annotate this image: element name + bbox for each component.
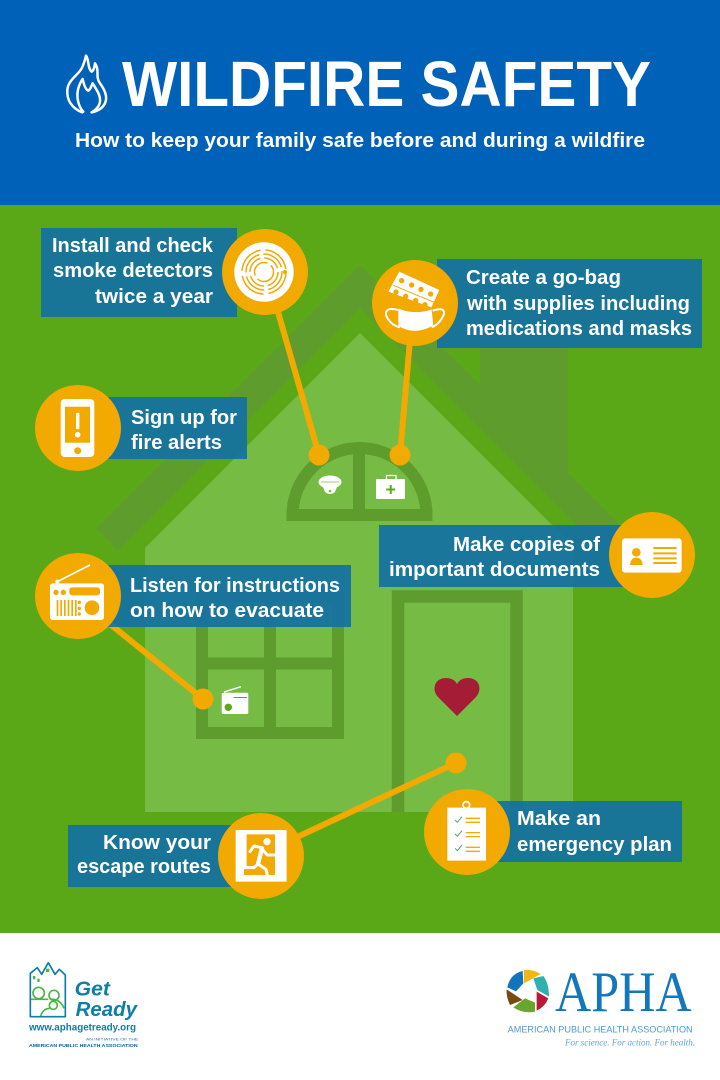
icon: small first aid bag xyxy=(376,476,405,499)
icon: radio xyxy=(50,565,104,620)
callout: fire alerts xyxy=(35,385,247,471)
logo: Get Ready: AMERICAN PUBLIC HEALTH ASSOCIATION xyxy=(29,1043,138,1048)
logo figures xyxy=(31,987,64,1016)
callout: go-bag: Create a go-bag xyxy=(466,267,621,289)
icon: phone alert xyxy=(61,399,94,457)
connector: radio xyxy=(105,620,214,710)
callout: documents: important documents xyxy=(389,559,600,581)
callout: emergency plan xyxy=(424,789,682,875)
square window xyxy=(202,596,338,733)
callout: smoke detectors: Install and check xyxy=(52,235,214,257)
callout: emergency plan: emergency plan xyxy=(517,834,672,856)
logo: Get Ready: Get xyxy=(75,978,111,1001)
callout: smoke detectors xyxy=(41,228,308,317)
roof band and chimney xyxy=(97,265,623,550)
callout: emergency plan: Make an xyxy=(517,808,601,830)
house body xyxy=(145,333,573,812)
logo wheel xyxy=(507,970,549,1012)
logo: APHA: AMERICAN PUBLIC HEALTH ASSOCIATION xyxy=(508,1024,693,1034)
logo: Get Ready: www.aphagetready.org xyxy=(28,1023,136,1034)
logo: APHA: APHA xyxy=(555,961,692,1024)
icon: heart xyxy=(435,678,479,716)
header banner xyxy=(0,0,720,205)
callout: escape routes: escape routes xyxy=(77,856,211,878)
callout: documents: Make copies of xyxy=(453,534,600,556)
subtitle: How to keep your family safe before and during a wildfire xyxy=(75,130,645,152)
callout: evacuation instructions xyxy=(35,553,351,639)
door xyxy=(398,596,516,812)
house illustration xyxy=(97,265,623,812)
icon: small smoke detector xyxy=(318,476,342,494)
green background xyxy=(0,205,720,933)
icon: pills and mask xyxy=(386,272,444,331)
connector: go-bag xyxy=(390,340,410,466)
icon: ID card xyxy=(622,538,682,573)
callout: escape routes xyxy=(68,813,304,899)
connector lines xyxy=(105,305,466,838)
callout: evacuation instructions: on how to evacuate xyxy=(130,600,324,622)
logo: APHA xyxy=(507,961,695,1049)
connector: escape route xyxy=(295,752,466,838)
logo house outline xyxy=(30,963,65,1017)
callout: go-bag: medications and masks xyxy=(466,318,692,340)
arched window xyxy=(292,448,426,519)
title: WILDFIRE SAFETY xyxy=(122,48,651,120)
callout: go-bag: with supplies including xyxy=(466,293,690,315)
icon: exit door runner xyxy=(236,830,287,882)
logo: Get Ready xyxy=(28,963,139,1048)
logo: Get Ready: AN INITIATIVE OF THE xyxy=(86,1036,139,1041)
icon: smoke detector xyxy=(234,242,294,302)
callout: smoke detectors: smoke detectors xyxy=(53,260,213,282)
icon: small radio xyxy=(222,687,248,714)
callout: fire alerts: Sign up for xyxy=(131,407,237,429)
logo: Get Ready: Ready xyxy=(76,998,138,1021)
callout: smoke detectors: twice a year xyxy=(95,286,213,308)
icon: flame xyxy=(67,56,106,112)
callout: evacuation instructions: Listen for instructions xyxy=(130,575,340,597)
callout: fire alerts: fire alerts xyxy=(131,432,222,454)
connector: smoke detector xyxy=(276,305,330,466)
callout: go-bag xyxy=(372,259,702,348)
icon: clipboard checklist xyxy=(447,802,486,861)
callout: documents xyxy=(379,512,695,598)
callout: escape routes: Know your xyxy=(103,832,211,854)
logo: APHA: For science. For action. For health. xyxy=(564,1038,695,1049)
